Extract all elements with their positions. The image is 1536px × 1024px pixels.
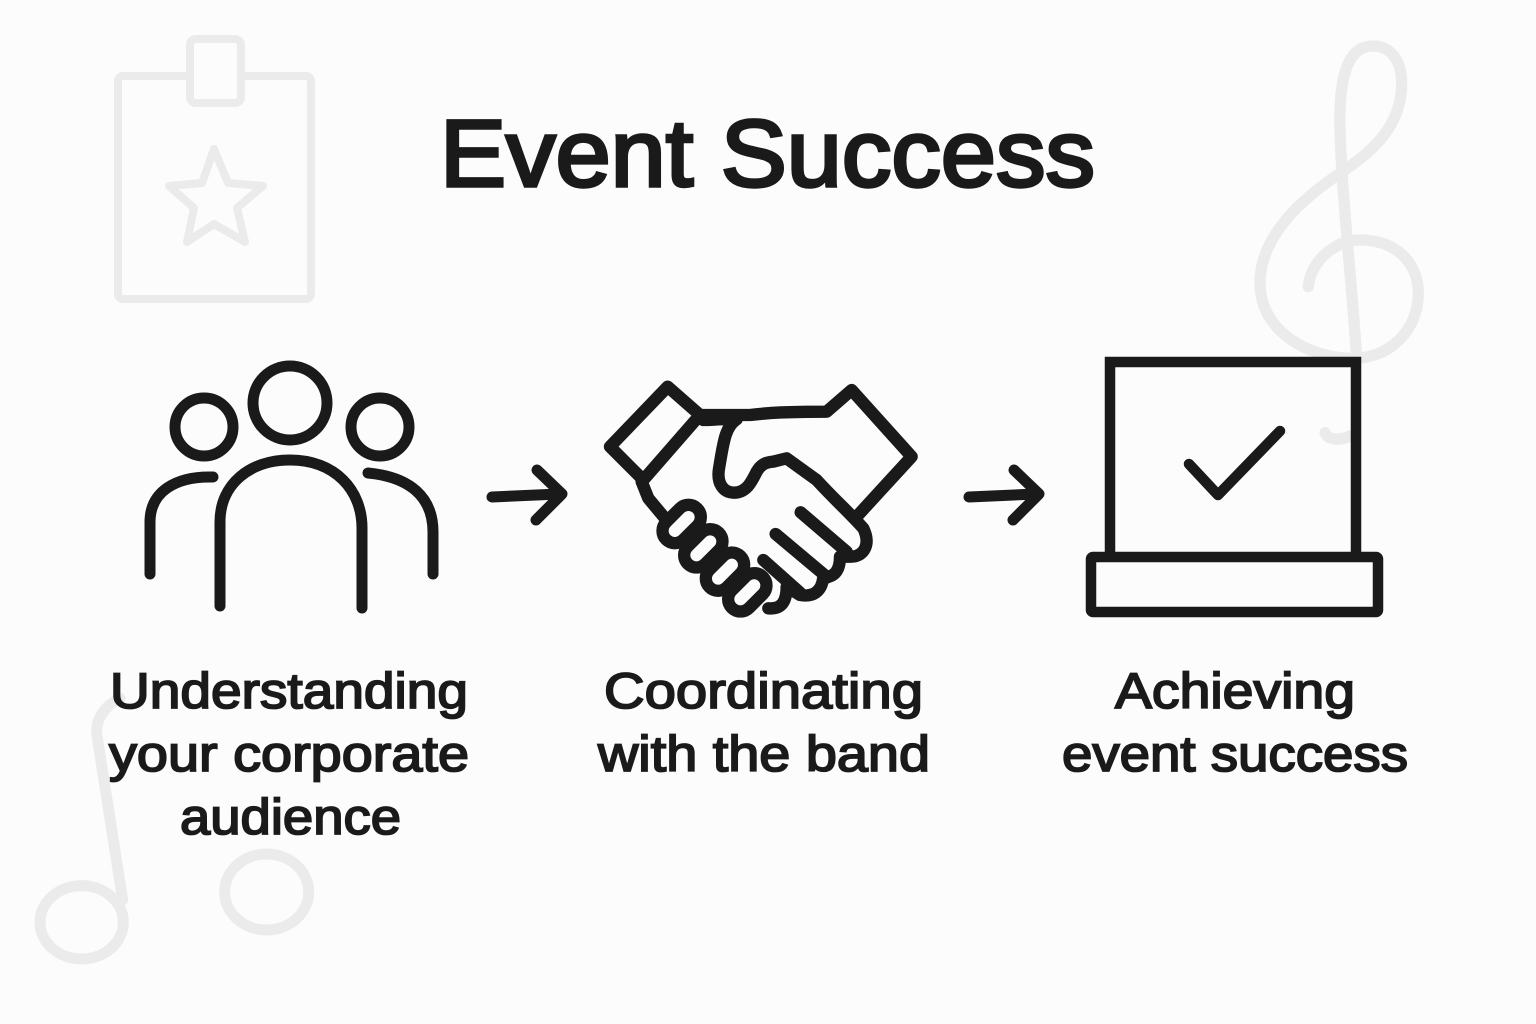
label: understanding your corporate audience: Understanding [110, 663, 468, 719]
label: achieving event success: Achieving [1115, 663, 1355, 719]
label: achieving event success [1062, 663, 1408, 782]
label: understanding your corporate audience: audience [180, 789, 401, 845]
label: achieving event success: event success [1062, 726, 1408, 782]
icon: handshake [610, 387, 912, 617]
arrow: audience to band [492, 470, 562, 520]
title: Event Success [440, 101, 1095, 207]
label: understanding your corporate audience [109, 663, 469, 845]
background icon: treble clef [1260, 46, 1418, 439]
label: understanding your corporate audience: your corporate [109, 726, 469, 782]
icon: laptop with check mark [1091, 362, 1378, 612]
background icon: event badge [118, 39, 311, 299]
background icon: music note [40, 698, 309, 959]
icon: people group [150, 366, 433, 608]
label: coordinating with the band [597, 663, 930, 782]
label: coordinating with the band: with the band [597, 726, 930, 782]
arrow: band to success [969, 470, 1039, 520]
label: coordinating with the band: Coordinating [604, 663, 923, 719]
